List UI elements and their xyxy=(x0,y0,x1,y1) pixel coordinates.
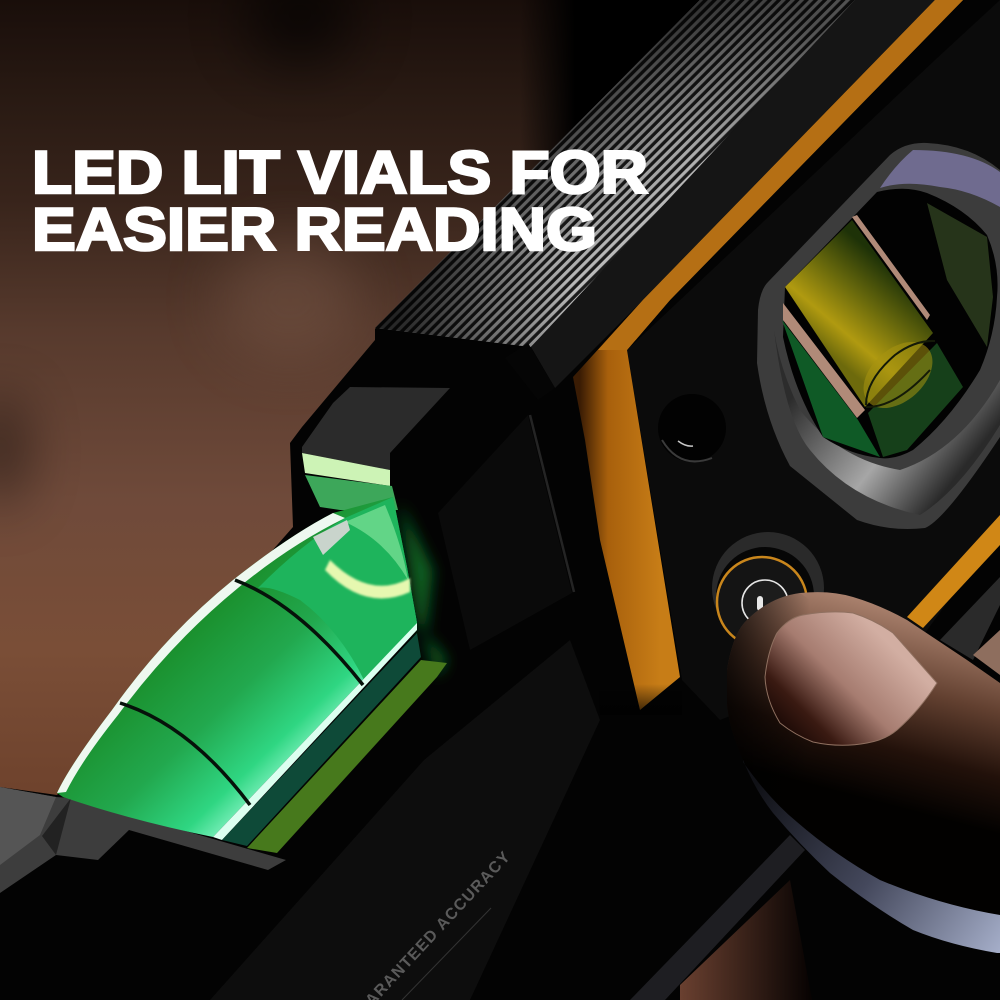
title xyxy=(32,139,648,263)
orange accent strip xyxy=(573,0,1000,715)
lower left grey housing edge xyxy=(0,787,286,893)
secondary vial window xyxy=(757,143,1000,529)
screw hole xyxy=(658,394,726,462)
ribbed top surface xyxy=(375,0,935,388)
title: EASIER READING xyxy=(32,196,597,263)
thumbnail xyxy=(765,612,937,745)
title: LED LIT VIALS FOR xyxy=(32,139,648,206)
thumb pressing button xyxy=(727,592,1000,953)
vial marking lines xyxy=(120,580,363,805)
lower handle groove and fingers behind xyxy=(630,577,1000,1000)
power button xyxy=(712,532,824,647)
front housing around vial xyxy=(302,343,574,650)
lit green bubble vial xyxy=(57,453,447,853)
